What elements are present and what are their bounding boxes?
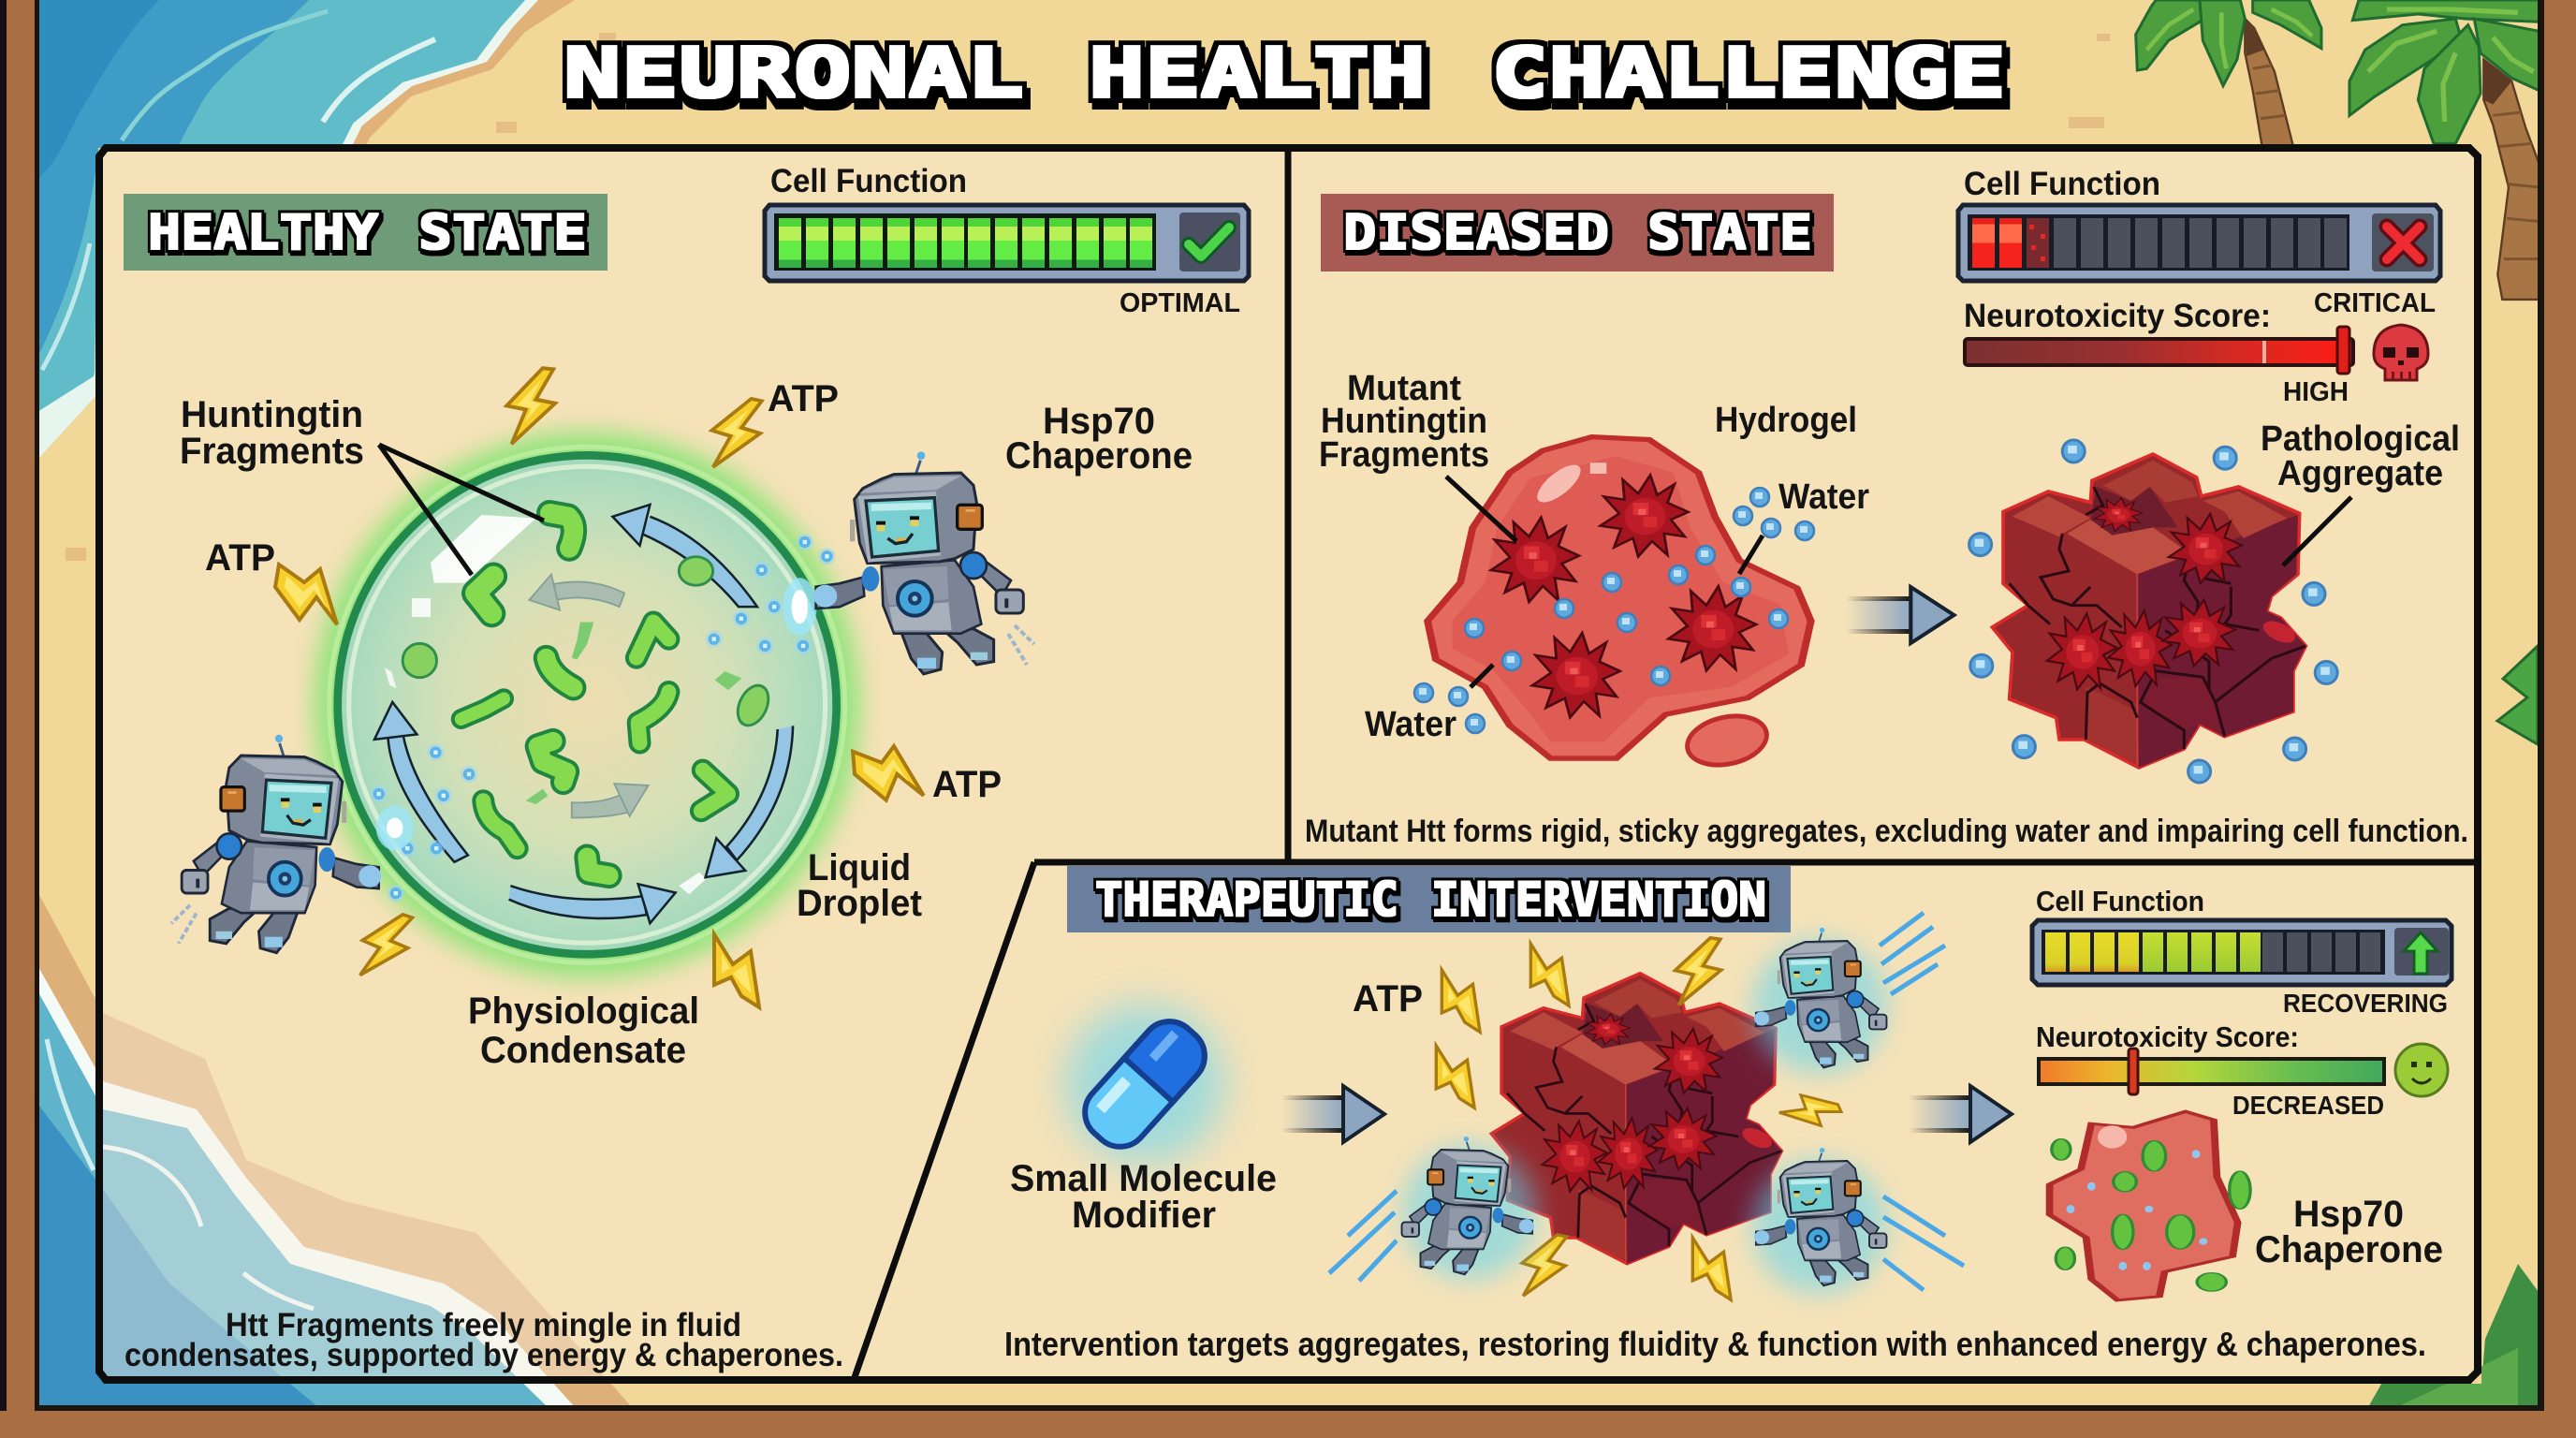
- label: huntingtin fragments: Fragments: [180, 431, 364, 472]
- background: top-left ocean: [37, 0, 575, 459]
- slider: neurotoxicity decreased: [2039, 1049, 2384, 1094]
- label: ATP right: ATP: [932, 764, 1002, 805]
- label: neurotoxicity score: Neurotoxicity Score:: [2036, 1020, 2299, 1053]
- label: small molecule modifier: [1010, 1158, 1277, 1236]
- pointer lines: huntingtin fragments: [379, 445, 544, 575]
- background: bottom-left ocean: [38, 893, 632, 1407]
- caption: healthy state: Htt Fragments freely mingle in fluid: [226, 1307, 741, 1343]
- icon: robot bottom right: [1752, 1148, 1964, 1294]
- pointer line: aggregate: [2283, 497, 2351, 565]
- palm trees: [2136, 0, 2539, 1407]
- gauge: cell function recovering: [2032, 920, 2452, 985]
- caption: healthy state: condensates, supported by energy & chaperones.: [124, 1337, 843, 1373]
- icon: skull: [2374, 325, 2428, 380]
- label: liquid droplet: Droplet: [797, 883, 922, 924]
- icon: chaperone robot right: [813, 451, 1034, 674]
- small blob: [1683, 710, 1771, 771]
- heading: healthy state: HEALTHY: [148, 205, 379, 261]
- label: huntingtin fragments: Huntingtin: [181, 394, 363, 435]
- label: small molecule modifier: Modifier: [1072, 1195, 1216, 1236]
- caption: therapeutic intervention: Intervention targets aggregates, restoring fluidity & function with enhanced energy & chaperones.: [1004, 1325, 2426, 1363]
- panel: diseased state: [1305, 166, 2468, 849]
- label: small molecule modifier: Small Molecule: [1010, 1158, 1277, 1199]
- label: hsp70 chaperone: Hsp70: [2293, 1194, 2404, 1235]
- sparkles: [352, 534, 836, 902]
- icon: smiley: [2395, 1044, 2448, 1096]
- label: ATP top: ATP: [768, 378, 839, 419]
- chart: pathological aggregate: [1992, 454, 2305, 768]
- status: optimal: OPTIMAL: [1120, 288, 1240, 318]
- label: hsp70 chaperone: Chaperone: [1005, 435, 1193, 477]
- status: high: HIGH: [2283, 377, 2349, 407]
- main panel: [99, 148, 2478, 1380]
- icon: therapy bolts: [1436, 933, 1843, 1303]
- chart: aggregate under treatment: [1491, 974, 1781, 1264]
- label: cell function: Cell Function: [2036, 885, 2204, 917]
- heading: healthy state: [124, 194, 607, 271]
- chart: recovered droplet: [2050, 1111, 2250, 1300]
- status: critical: CRITICAL: [2314, 288, 2436, 318]
- panel: healthy state: [124, 163, 1249, 1373]
- icon: pill: [1065, 1005, 1224, 1164]
- heading: therapeutic intervention: [1067, 866, 1791, 932]
- label: ATP: ATP: [1353, 978, 1423, 1020]
- icon: chaperone robot left: [171, 735, 381, 953]
- label: physiological condensate: Physiological: [468, 990, 699, 1032]
- arrow: aggregate to recovered: [1909, 1086, 2012, 1142]
- label: water upper: Water: [1778, 477, 1869, 517]
- pointer lines: diseased: [1446, 477, 1763, 687]
- water droplets around aggregate: [1969, 440, 2337, 783]
- label: neurotoxicity score: Neurotoxicity Score:: [1964, 298, 2271, 334]
- icon: ATP bolts: [275, 365, 924, 1007]
- label: hsp70 chaperone: Chaperone: [2255, 1229, 2443, 1270]
- label: liquid droplet: Liquid: [808, 847, 911, 888]
- water droplets: [1414, 488, 1814, 733]
- chart: physiological condensate droplet: [329, 447, 845, 962]
- label: mutant huntingtin fragments: Mutant: [1347, 369, 1461, 408]
- label: physiological condensate: [468, 990, 699, 1071]
- arrow: pill to aggregate: [1281, 1086, 1384, 1142]
- icon: robot bottom left: [1329, 1137, 1537, 1281]
- sand specks: [66, 33, 2110, 561]
- title: NEURONAL: [564, 34, 1024, 112]
- label: pathological aggregate: [2261, 419, 2460, 493]
- heading: diseased state: STATE: [1647, 205, 1812, 261]
- label: mutant huntingtin fragments: Fragments: [1319, 435, 1489, 475]
- caption: diseased state: Mutant Htt forms rigid, sticky aggregates, excluding water and impairing cell function.: [1305, 814, 2468, 849]
- heading: diseased state: [1321, 194, 1834, 271]
- heading: healthy state: STATE: [418, 205, 587, 261]
- label: ATP left: ATP: [205, 537, 275, 579]
- label: hsp70 chaperone: [2255, 1194, 2443, 1270]
- label: mutant huntingtin fragments: [1319, 369, 1489, 475]
- title: CHALLENGE: [1491, 34, 2006, 112]
- icon: check mark: [1189, 227, 1229, 257]
- caption: healthy state: [124, 1307, 843, 1373]
- label: hsp70 chaperone: Hsp70: [1043, 401, 1155, 442]
- label: pathological aggregate: Aggregate: [2277, 454, 2443, 493]
- flow arrows: [374, 505, 793, 923]
- arrow: to aggregate: [1846, 587, 1954, 643]
- label: hsp70 chaperone: [1005, 401, 1193, 477]
- label: liquid droplet: [797, 847, 922, 924]
- gauge: cell function optimal: [765, 205, 1249, 281]
- icon: up arrow: [2404, 932, 2437, 974]
- heading: diseased state: DISEASED: [1343, 205, 1609, 261]
- label: pathological aggregate: Pathological: [2261, 419, 2460, 459]
- title: [564, 34, 2006, 112]
- label: huntingtin fragments: [180, 394, 364, 472]
- label: physiological condensate: Condensate: [480, 1030, 686, 1071]
- chart: hydrogel blob: [1427, 437, 1811, 758]
- icon: robot top right: [1752, 913, 1945, 1074]
- panel: therapeutic intervention: [1004, 866, 2452, 1363]
- slider: neurotoxicity high: [1965, 327, 2353, 374]
- label: mutant huntingtin fragments: Huntingtin: [1321, 402, 1487, 441]
- label: cell function: Cell Function: [1964, 166, 2160, 202]
- label: water lower: Water: [1365, 705, 1456, 744]
- icon: x mark: [2387, 227, 2420, 259]
- label: hydrogel: Hydrogel: [1715, 401, 1857, 440]
- title: HEALTH: [1089, 34, 1426, 112]
- gauge: cell function critical: [1958, 205, 2440, 281]
- huntingtin fragments: [461, 513, 728, 875]
- heading: therapeutic intervention: INTERVENTION: [1431, 873, 1766, 927]
- status: recovering: RECOVERING: [2283, 989, 2448, 1018]
- label: cell function: Cell Function: [770, 163, 967, 199]
- panel dividers: [854, 148, 2478, 1380]
- status: decreased: DECREASED: [2232, 1091, 2384, 1120]
- heading: therapeutic intervention: THERAPEUTIC: [1095, 873, 1398, 927]
